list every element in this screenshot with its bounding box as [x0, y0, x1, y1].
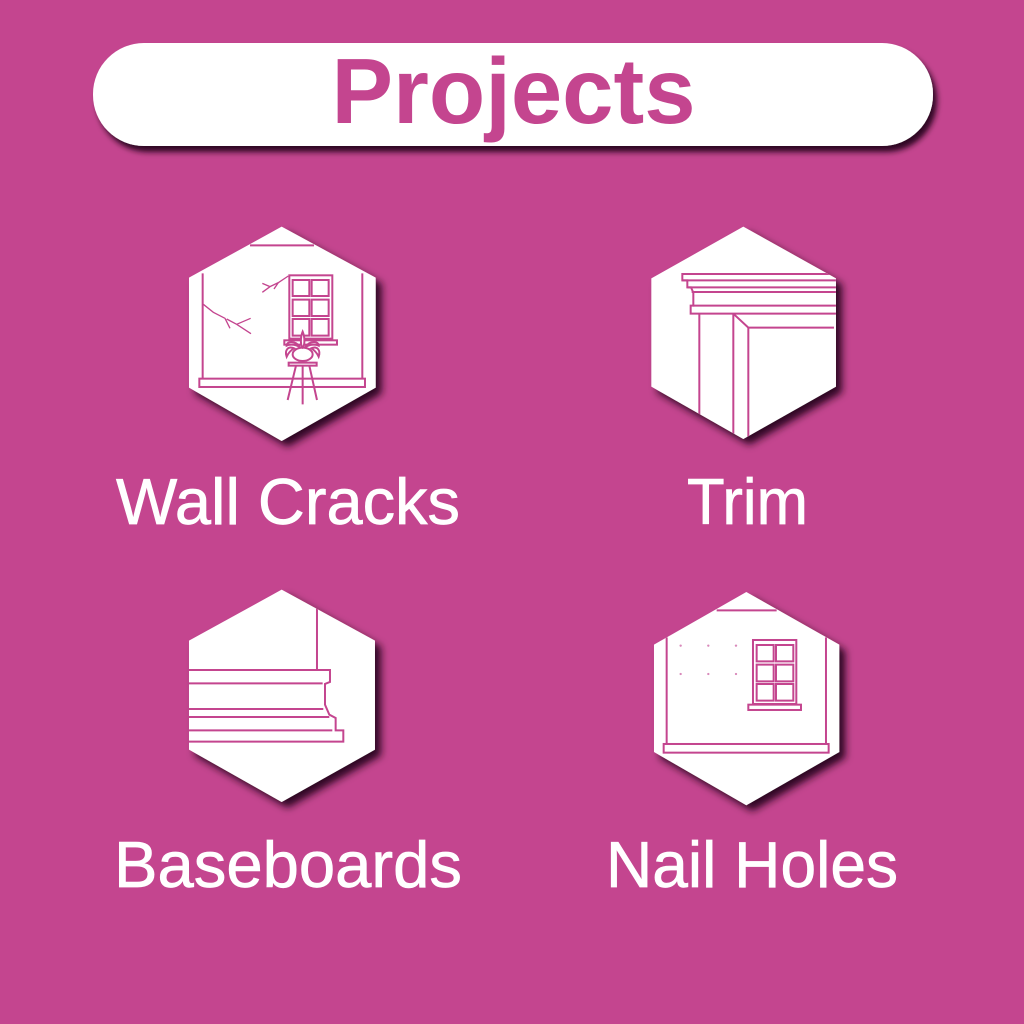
title banner — [93, 39, 933, 146]
title: Projects — [332, 39, 696, 143]
label: Nail Holes: Nail Holes — [606, 828, 898, 901]
icon: baseboards hexagon — [189, 590, 375, 802]
label: Wall Cracks: Wall Cracks — [116, 465, 460, 538]
label: Trim: Trim — [687, 465, 808, 538]
icon: nail holes hexagon — [654, 592, 839, 805]
label: Baseboards: Baseboards — [114, 828, 462, 901]
icon: wall cracks hexagon — [189, 227, 376, 441]
icon: trim hexagon — [651, 227, 836, 442]
